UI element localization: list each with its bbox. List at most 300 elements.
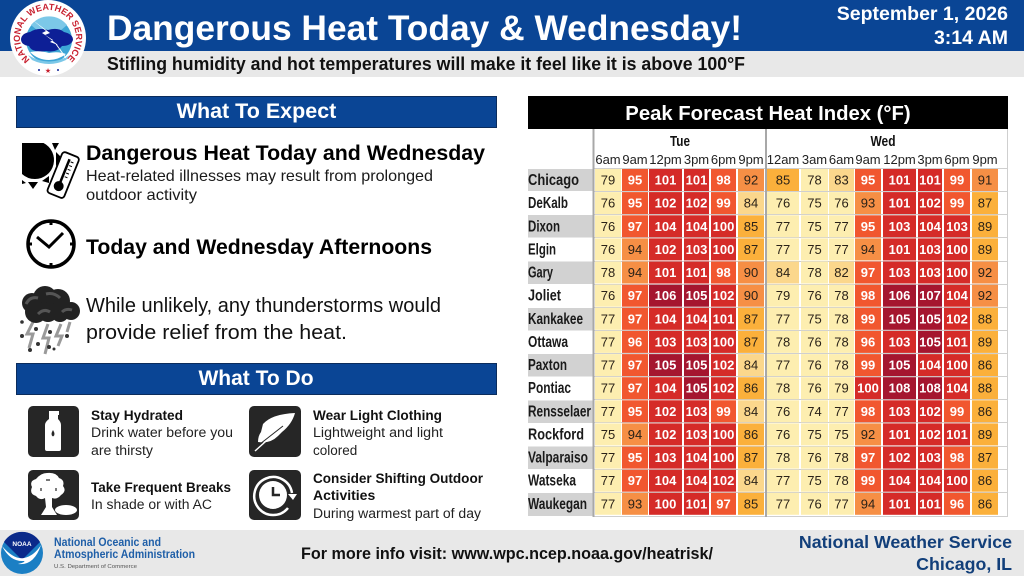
row: Rensselaer: 86 xyxy=(978,404,992,419)
row: Waukegan: 93 xyxy=(628,496,642,511)
row: Ottawa: 103 xyxy=(889,334,910,349)
row: Paxton: 78 xyxy=(834,358,849,373)
row: Ottawa: 78 xyxy=(834,334,849,349)
row: Chicago: 83 xyxy=(834,172,849,188)
time labels: 6pm xyxy=(944,152,970,167)
text: NOAA name: National Oceanic and xyxy=(54,537,161,549)
row: Elgin xyxy=(528,238,998,260)
row: Elgin: 89 xyxy=(978,242,992,257)
row: Paxton: 86 xyxy=(978,358,992,373)
row: Paxton: 76 xyxy=(807,358,822,373)
row: Paxton: 99 xyxy=(861,358,875,373)
row: Dixon: 77 xyxy=(834,219,849,234)
row: DeKalb: 84 xyxy=(744,196,758,211)
row: Kankakee: 105 xyxy=(919,311,941,326)
row: Valparaiso: 78 xyxy=(776,450,790,465)
row: DeKalb: 93 xyxy=(861,196,875,211)
row: Dixon: 97 xyxy=(628,219,642,234)
row: Waukegan: 77 xyxy=(776,496,790,511)
row: Pontiac: Pontiac xyxy=(528,380,571,397)
row: Joliet: 102 xyxy=(713,288,734,303)
row: Joliet: 106 xyxy=(655,288,676,303)
row: Kankakee: 77 xyxy=(601,311,615,326)
row: Kankakee: 101 xyxy=(713,311,734,326)
row: Gary: 94 xyxy=(628,265,642,280)
row: Rockford: 76 xyxy=(776,427,790,442)
row: Valparaiso: 97 xyxy=(861,450,875,465)
row: Kankakee: 75 xyxy=(807,311,822,326)
row: Kankakee: 78 xyxy=(834,311,849,326)
time labels: 3pm xyxy=(684,152,709,167)
row: Rensselaer: 74 xyxy=(807,404,822,419)
date and time: 3:14 AM xyxy=(934,27,1008,49)
row: Pontiac xyxy=(528,377,998,399)
row: Waukegan: 100 xyxy=(655,496,676,511)
row: Rensselaer: 102 xyxy=(919,404,941,419)
row: Dixon: 104 xyxy=(655,219,677,234)
row: Chicago: 85 xyxy=(776,172,790,188)
text: dangerous heat: Heat-related illnesses may result from prolonged xyxy=(86,168,433,185)
text: dangerous heat: Dangerous Heat Today and Wednesday xyxy=(86,142,485,165)
row: Paxton: 104 xyxy=(919,358,942,373)
row: Watseka: 99 xyxy=(861,473,875,488)
row: Joliet: 104 xyxy=(946,288,969,303)
row: Waukegan xyxy=(528,493,998,515)
date and time xyxy=(837,3,1008,49)
time labels: 9am xyxy=(855,152,881,167)
text: thunderstorms: While unlikely, any thunderstorms would xyxy=(86,295,441,317)
row: Gary xyxy=(528,262,998,284)
header banner xyxy=(0,0,1024,77)
row: Gary: Gary xyxy=(528,264,553,282)
row: Rensselaer: 77 xyxy=(834,404,849,419)
text: light clothing: Lightweight and light xyxy=(313,425,443,440)
row: DeKalb: 76 xyxy=(834,196,849,211)
row: Dixon xyxy=(528,215,998,237)
row: Valparaiso: 98 xyxy=(950,450,964,465)
row: Valparaiso: 100 xyxy=(713,450,734,465)
row: Rockford: 103 xyxy=(686,427,707,442)
row: DeKalb: 87 xyxy=(978,196,992,211)
row: DeKalb: 99 xyxy=(950,196,964,211)
row: Rockford: 92 xyxy=(861,427,875,442)
row: Rockford: 86 xyxy=(744,427,758,442)
row: Gary: 82 xyxy=(834,265,849,280)
text: shifting activities: Activities xyxy=(313,487,375,503)
row: Joliet: 78 xyxy=(834,288,849,303)
row: DeKalb: 76 xyxy=(601,196,615,211)
text: more info: For more info visit: www.wpc.ncep.noaa.gov/heatrisk/ xyxy=(301,544,713,563)
day labels: Tue xyxy=(670,133,690,150)
row: Chicago: 92 xyxy=(744,172,758,188)
row: Joliet: 76 xyxy=(807,288,822,303)
row: DeKalb: 102 xyxy=(919,196,941,211)
icon: NOAA logo: NOAA xyxy=(12,541,32,548)
text: thunderstorms xyxy=(86,295,441,344)
time labels: 3pm xyxy=(917,152,943,167)
row: Pontiac: 108 xyxy=(889,381,910,396)
row: DeKalb: 76 xyxy=(776,196,790,211)
row: Valparaiso: 104 xyxy=(686,450,708,465)
heading: what to expect xyxy=(16,96,496,128)
row: Valparaiso: 87 xyxy=(978,450,992,465)
row: Pontiac: 108 xyxy=(919,381,941,396)
row: Elgin: 94 xyxy=(628,242,642,257)
row: DeKalb: 102 xyxy=(655,196,676,211)
row: Elgin: 101 xyxy=(889,242,910,257)
row: Kankakee: 104 xyxy=(655,311,677,326)
row: Elgin: 87 xyxy=(744,242,758,257)
row: Joliet: Joliet xyxy=(528,288,561,305)
icon: tree in shade xyxy=(28,470,79,520)
row: Pontiac: 97 xyxy=(628,381,642,396)
row: Ottawa: 78 xyxy=(776,334,790,349)
day labels: Wed xyxy=(870,133,896,150)
text: stay hydrated: Drink water before you xyxy=(91,425,233,440)
text: light clothing: Wear Light Clothing xyxy=(313,407,442,423)
panel: what to expect xyxy=(16,96,496,354)
row: Paxton: 105 xyxy=(686,358,707,373)
row: Watseka: 77 xyxy=(776,473,790,488)
icon: clock xyxy=(28,221,74,267)
row: Dixon: 85 xyxy=(744,219,758,234)
row: Waukegan: 76 xyxy=(807,496,822,511)
text: dangerous heat: outdoor activity xyxy=(86,187,197,204)
row: Rockford: 75 xyxy=(601,427,615,442)
row: Ottawa: 77 xyxy=(601,334,615,349)
row: Rensselaer: 102 xyxy=(655,404,676,419)
row: Pontiac: 86 xyxy=(744,381,758,396)
row: Watseka: 102 xyxy=(713,473,734,488)
row: Gary: 78 xyxy=(807,265,822,280)
row: Pontiac: 78 xyxy=(776,381,790,396)
row: Chicago: 101 xyxy=(655,172,676,188)
row: Rockford: 101 xyxy=(946,427,968,442)
time labels: 6am xyxy=(595,152,621,167)
icon: NWS logo: NATIONAL WEATHER SERVICE xyxy=(14,4,82,64)
text: NWS office: National Weather Service xyxy=(799,532,1012,552)
icon: feather xyxy=(249,406,301,457)
date and time: September 1, 2026 xyxy=(837,3,1008,25)
row: Ottawa: 100 xyxy=(713,334,734,349)
row: Paxton: 100 xyxy=(946,358,968,373)
row: Kankakee: 104 xyxy=(686,311,708,326)
row: Dixon: 104 xyxy=(919,219,942,234)
row: Chicago: 101 xyxy=(889,172,910,188)
row: Gary: 100 xyxy=(946,265,968,280)
row: DeKalb: 101 xyxy=(889,196,910,211)
text: stay hydrated xyxy=(91,407,233,458)
text: stay hydrated: are thirsty xyxy=(91,443,153,458)
row: Gary: 78 xyxy=(601,265,615,280)
row: Ottawa: Ottawa xyxy=(528,334,568,351)
heading: peak forecast heat index xyxy=(528,96,1008,129)
row: Paxton: 105 xyxy=(655,358,676,373)
row: Paxton xyxy=(528,354,998,376)
row: Elgin: 94 xyxy=(861,242,875,257)
row: Joliet: 79 xyxy=(776,288,790,303)
row: Gary: 101 xyxy=(655,265,676,280)
row: Pontiac: 104 xyxy=(655,381,677,396)
row: Paxton: 105 xyxy=(889,358,910,373)
row: Rensselaer: 99 xyxy=(716,404,731,419)
row: Gary: 90 xyxy=(744,265,758,280)
row: Waukegan: 96 xyxy=(950,496,964,511)
row: Rensselaer: 76 xyxy=(776,404,790,419)
row: Watseka: 97 xyxy=(628,473,642,488)
row: Rockford: 100 xyxy=(713,427,734,442)
time labels: 9pm xyxy=(972,152,998,167)
row: Kankakee: Kankakee xyxy=(528,311,583,328)
row: Ottawa: 96 xyxy=(628,334,642,349)
heading: what to expect: What To Expect xyxy=(177,99,336,123)
row: Ottawa: 87 xyxy=(744,334,758,349)
icon: water bottle xyxy=(28,406,79,457)
text: NOAA name xyxy=(54,537,195,570)
row: Paxton: 77 xyxy=(601,358,615,373)
row: Watseka: 104 xyxy=(655,473,677,488)
row: Rensselaer: 103 xyxy=(686,404,707,419)
time labels: 12pm xyxy=(883,152,916,167)
time labels: 12am xyxy=(767,152,799,167)
row: Valparaiso: 78 xyxy=(834,450,849,465)
row: DeKalb: 75 xyxy=(807,196,822,211)
day labels xyxy=(670,133,896,150)
row: Rockford: 75 xyxy=(834,427,849,442)
row: Watseka: 77 xyxy=(601,473,615,488)
row: Kankakee: 97 xyxy=(628,311,642,326)
row: Kankakee: 88 xyxy=(978,311,992,326)
row: Kankakee: 102 xyxy=(946,311,968,326)
row: Dixon: Dixon xyxy=(528,218,560,235)
row: Elgin: 103 xyxy=(919,242,941,257)
row: Dixon: 103 xyxy=(889,219,910,234)
row: Dixon: 103 xyxy=(946,219,968,234)
row: Chicago: 95 xyxy=(628,172,642,188)
row: Elgin: 100 xyxy=(946,242,968,257)
row: Gary: 98 xyxy=(716,265,731,280)
time labels xyxy=(595,152,998,167)
row: Valparaiso: Valparaiso xyxy=(528,450,588,467)
row: Pontiac: 105 xyxy=(686,381,707,396)
row: Elgin: 103 xyxy=(686,242,707,257)
heading: what to do: What To Do xyxy=(198,367,314,390)
heading: what to do xyxy=(16,364,496,394)
row: Watseka: 84 xyxy=(744,473,758,488)
row: Gary: 103 xyxy=(919,265,941,280)
row: Ottawa: 89 xyxy=(978,334,992,349)
row: Joliet: 76 xyxy=(601,288,615,303)
row: Kankakee xyxy=(528,308,998,330)
row: Pontiac: 104 xyxy=(946,381,969,396)
row: Waukegan: 85 xyxy=(744,496,758,511)
row: Pontiac: 102 xyxy=(713,381,734,396)
row: Paxton: 77 xyxy=(776,358,790,373)
row: Watseka: 104 xyxy=(919,473,942,488)
row: Joliet: 98 xyxy=(861,288,875,303)
row: Watseka: 78 xyxy=(834,473,849,488)
row: Pontiac: 77 xyxy=(601,381,615,396)
row: Joliet: 92 xyxy=(978,288,992,303)
text: take frequent breaks: Take Frequent Breaks xyxy=(91,479,231,495)
row: Paxton: 84 xyxy=(744,358,758,373)
row: Rockford: Rockford xyxy=(528,426,584,443)
row: Rockford xyxy=(528,423,998,445)
row: Rockford: 94 xyxy=(628,427,642,442)
footer band xyxy=(0,530,1024,576)
time labels: 3am xyxy=(802,152,827,167)
row: Chicago: 101 xyxy=(686,172,707,188)
row: Rockford: 102 xyxy=(919,427,941,442)
row: DeKalb: 99 xyxy=(716,196,731,211)
row: Dixon: 100 xyxy=(713,219,734,234)
row: Rensselaer: Rensselaer xyxy=(528,403,591,420)
icon: storm cloud xyxy=(20,286,80,354)
row: Dixon: 104 xyxy=(686,219,708,234)
text: take frequent breaks: In shade or with AC xyxy=(91,497,212,512)
row: Kankakee: 99 xyxy=(861,311,875,326)
row: Rensselaer: 95 xyxy=(628,404,642,419)
title: Dangerous Heat Today & Wednesday! xyxy=(107,9,742,48)
text: stay hydrated: Stay Hydrated xyxy=(91,407,183,423)
row: Waukegan: 101 xyxy=(686,496,707,511)
row: Joliet: 105 xyxy=(686,288,707,303)
row: Chicago: 79 xyxy=(601,172,615,188)
row: Dixon: 77 xyxy=(776,219,790,234)
row: Valparaiso: 95 xyxy=(628,450,642,465)
row: Valparaiso: 87 xyxy=(744,450,758,465)
row: Elgin: 77 xyxy=(834,242,849,257)
row: Dixon: 75 xyxy=(807,219,822,234)
time labels: 9am xyxy=(622,152,648,167)
row: Rockford: 102 xyxy=(655,427,676,442)
row: DeKalb: 102 xyxy=(686,196,707,211)
row: Ottawa: 105 xyxy=(919,334,941,349)
row: Watseka: 75 xyxy=(807,473,822,488)
row: Chicago: 91 xyxy=(978,172,992,188)
row: Valparaiso: 102 xyxy=(889,450,910,465)
text: NOAA name: Atmospheric Administration xyxy=(54,549,195,561)
row: Waukegan: 77 xyxy=(601,496,615,511)
row: Valparaiso: 103 xyxy=(919,450,941,465)
row: Dixon: 89 xyxy=(978,219,992,234)
row: Elgin: 75 xyxy=(807,242,822,257)
row: Pontiac: 88 xyxy=(978,381,992,396)
time labels: 6am xyxy=(829,152,854,167)
table: heat index forecast xyxy=(528,129,1008,517)
row: Pontiac: 76 xyxy=(807,381,822,396)
row: Rensselaer: 77 xyxy=(601,404,615,419)
row: Joliet: 97 xyxy=(628,288,642,303)
icon: sun and thermometer xyxy=(22,143,80,199)
text: NWS office: Chicago, IL xyxy=(916,554,1012,574)
row: Dixon: 95 xyxy=(861,219,875,234)
row: Pontiac: 100 xyxy=(857,381,879,396)
row: DeKalb: 95 xyxy=(628,196,642,211)
row: Paxton: 102 xyxy=(713,358,734,373)
row: Chicago: 95 xyxy=(861,172,875,188)
text: dangerous heat xyxy=(86,142,485,204)
panel: what to do xyxy=(16,364,496,521)
row: Waukegan: 94 xyxy=(861,496,875,511)
row: Gary: 103 xyxy=(889,265,910,280)
row: Chicago: 98 xyxy=(716,172,731,188)
row: Chicago: 101 xyxy=(919,172,941,188)
row: Ottawa: 103 xyxy=(655,334,676,349)
row: Joliet: 90 xyxy=(744,288,758,303)
row: Rockford: 89 xyxy=(978,427,992,442)
row: Ottawa: 103 xyxy=(686,334,707,349)
row: Ottawa xyxy=(528,331,998,353)
row: Paxton: Paxton xyxy=(528,357,567,374)
row: DeKalb xyxy=(528,192,998,214)
heading: peak forecast heat index: Peak Forecast Heat Index (°F) xyxy=(625,103,911,125)
row: Rensselaer: 98 xyxy=(861,404,875,419)
row: Elgin: 100 xyxy=(713,242,734,257)
row: Waukegan: 77 xyxy=(834,496,849,511)
row: Rockford: 101 xyxy=(889,427,910,442)
row: Dixon: 76 xyxy=(601,219,615,234)
row: Pontiac: 79 xyxy=(834,381,849,396)
text: thunderstorms: provide relief from the heat. xyxy=(86,322,347,344)
text: NOAA name: U.S. Department of Commerce xyxy=(54,564,137,570)
row: Valparaiso: 76 xyxy=(807,450,822,465)
row: Rensselaer: 84 xyxy=(744,404,758,419)
text: take frequent breaks xyxy=(91,479,231,512)
row: Gary: 97 xyxy=(861,265,875,280)
row: Watseka: Watseka xyxy=(528,473,576,490)
row: Joliet xyxy=(528,285,998,307)
row: Kankakee: 105 xyxy=(889,311,910,326)
row: Chicago: Chicago xyxy=(528,172,579,189)
row: Elgin: 77 xyxy=(776,242,790,257)
text: NWS office xyxy=(799,532,1012,574)
row: Chicago xyxy=(528,169,998,191)
icon: NWS logo: ★ xyxy=(45,67,51,75)
row: Elgin: Elgin xyxy=(528,241,556,258)
text: shifting activities: During warmest part of day xyxy=(313,506,481,521)
row: Elgin: 76 xyxy=(601,242,615,257)
row: Ottawa: 76 xyxy=(807,334,822,349)
text: afternoons: Today and Wednesday Afternoons xyxy=(86,236,432,259)
row: Watseka: 104 xyxy=(686,473,708,488)
row: Rensselaer: 99 xyxy=(950,404,964,419)
text: light clothing xyxy=(313,407,443,458)
row: Ottawa: 101 xyxy=(946,334,968,349)
row: Waukegan: Waukegan xyxy=(528,496,587,513)
text: shifting activities xyxy=(313,470,484,521)
row: Gary: 101 xyxy=(686,265,707,280)
subtitle: Stifling humidity and hot temperatures will make it feel like it is above 100°F xyxy=(107,54,745,74)
row: Valparaiso: 77 xyxy=(601,450,615,465)
row: Elgin: 102 xyxy=(655,242,676,257)
time labels: 9pm xyxy=(738,152,764,167)
row: Chicago: 99 xyxy=(950,172,964,188)
row: Watseka xyxy=(528,470,998,492)
row: Paxton: 97 xyxy=(628,358,642,373)
row: Chicago: 78 xyxy=(807,172,822,188)
row: Kankakee: 87 xyxy=(744,311,758,326)
row: Gary: 92 xyxy=(978,265,992,280)
row: Waukegan: 101 xyxy=(889,496,910,511)
row: Watseka: 86 xyxy=(978,473,992,488)
row: Rensselaer xyxy=(528,400,998,422)
row: Watseka: 104 xyxy=(889,473,911,488)
row: Gary: 84 xyxy=(776,265,790,280)
time labels: 6pm xyxy=(711,152,736,167)
row: Rockford: 75 xyxy=(807,427,822,442)
row: Waukegan: 86 xyxy=(978,496,992,511)
